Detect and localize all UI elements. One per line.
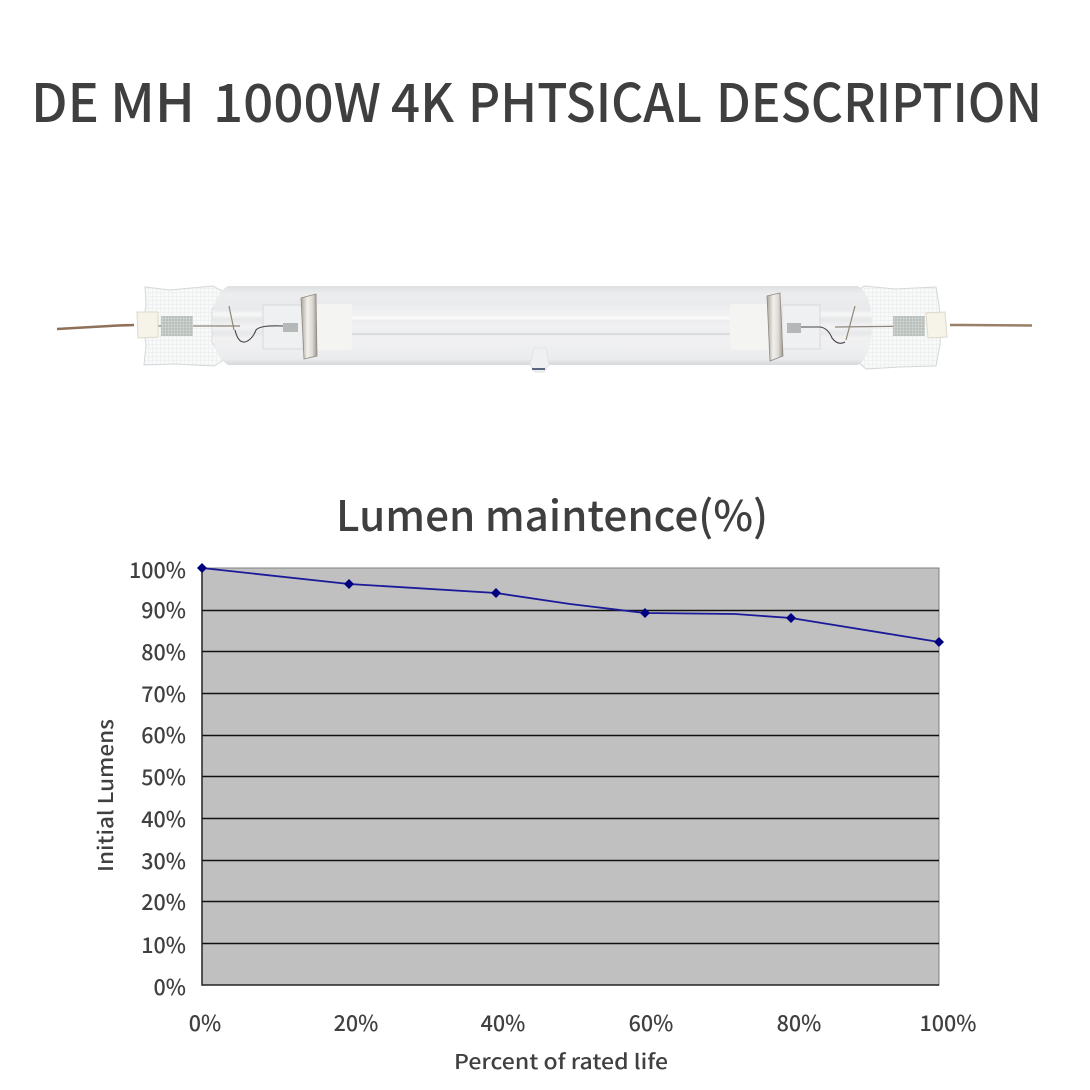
plot area [202,568,939,985]
x axis tick labels: 0% [189,1007,221,1038]
left lead wire [57,325,134,329]
exhaust tip [530,348,549,372]
x axis tick labels [189,1007,976,1038]
right pinch seal [856,286,941,369]
y axis tick labels: 20% [141,886,186,917]
right foil [893,316,925,336]
title: 4K [391,62,455,138]
x axis title: Percent of rated life [454,1045,668,1075]
x axis tick labels: 60% [629,1007,673,1038]
y axis tick labels: 60% [141,719,186,750]
title: 1000W [213,62,381,138]
right lead wire [950,324,1032,327]
title: DESCRIPTION [716,62,1042,138]
left electrode capsule [283,323,298,332]
left inner glass holder [263,305,303,349]
arc tube body [352,306,730,345]
y axis tick labels: 40% [141,803,186,834]
x axis tick labels: 80% [777,1007,821,1038]
title: MH [110,62,195,138]
x axis tick labels: 40% [481,1007,525,1038]
left ceramic cap [137,312,158,338]
x axis tick labels: 100% [920,1007,976,1038]
y axis tick labels: 70% [141,678,186,709]
data line [202,568,939,642]
data markers [197,563,944,647]
lamp photo: double-ended metal halide bulb [57,286,1032,372]
right inner glass holder [782,305,820,349]
arc tube right collar [730,304,768,350]
title [31,62,1042,138]
x axis tick labels: 20% [334,1007,378,1038]
y axis tick labels: 80% [141,636,186,667]
title: PHTSICAL [468,62,702,138]
line chart: lumen maintenance [89,554,976,1075]
y axis tick labels [129,554,186,1002]
left pinch seal [143,286,224,366]
y axis tick labels: 10% [141,929,186,960]
right support wires [835,306,925,340]
title: DE [31,62,99,138]
y axis tick labels: 100% [129,554,186,585]
chart heading: Lumen maintence(%) [336,483,768,544]
y axis tick labels: 90% [141,594,186,625]
right electrode capsule [787,323,801,333]
right ceramic cap [926,312,947,338]
left support wires [158,306,240,330]
y axis title: Initial Lumens [89,719,119,872]
right metal clamp [767,293,783,361]
y axis tick labels: 0% [154,971,186,1002]
glass tube [212,286,872,365]
left foil [161,316,193,336]
y axis tick labels: 50% [141,761,186,792]
arc tube left collar [316,304,352,350]
left metal clamp [301,294,317,359]
y axis tick labels: 30% [141,845,186,876]
